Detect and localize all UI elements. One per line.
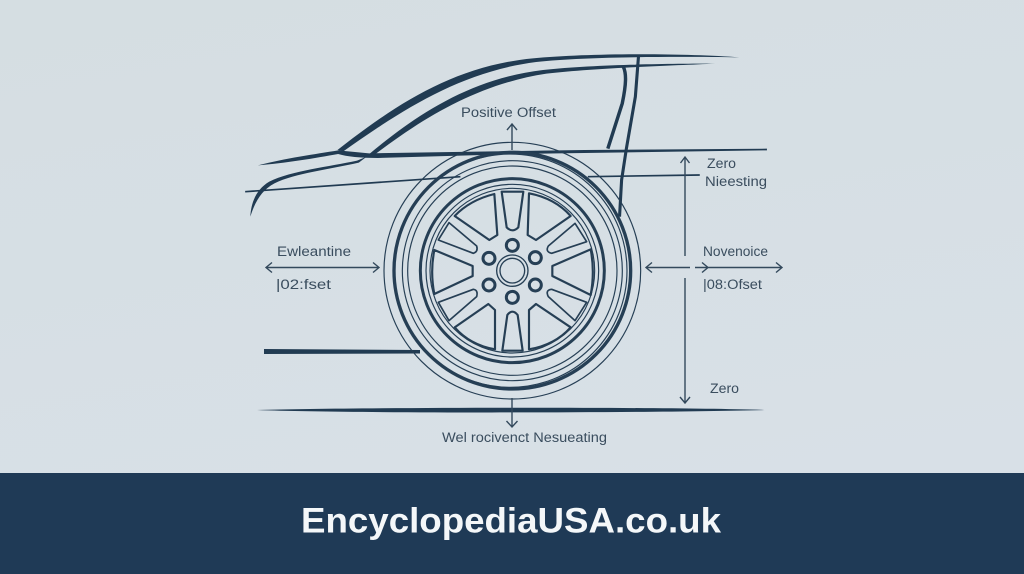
label: right upper: Novenoice xyxy=(703,244,768,259)
label: zero nesting: Zero xyxy=(707,156,736,171)
rim rings xyxy=(420,179,604,363)
footer band xyxy=(0,473,1024,574)
arrow: left double headed xyxy=(266,262,379,272)
label: left lower: |02:fset xyxy=(276,277,331,292)
car body outline xyxy=(245,54,767,217)
arrow: vertical lower xyxy=(680,278,690,403)
label: zero: Zero xyxy=(710,381,739,396)
tyre rings xyxy=(384,142,641,399)
B pillar xyxy=(620,57,638,217)
label: zero nesting xyxy=(705,156,767,189)
ground line xyxy=(257,408,767,412)
lug nuts xyxy=(483,239,541,303)
spoke windows xyxy=(432,192,593,351)
belt line xyxy=(258,149,767,165)
window inner line xyxy=(368,64,715,155)
footer title: EncyclopediaUSA.co.uk xyxy=(301,502,722,540)
label: bottom: Wel rocivenct Nesueating xyxy=(442,430,607,445)
arrow: bottom down xyxy=(506,398,518,427)
sill line xyxy=(245,175,700,192)
arrow: vertical upper xyxy=(680,157,690,256)
lower body line xyxy=(264,349,420,354)
wheel xyxy=(384,142,641,399)
roof outer line xyxy=(337,54,739,151)
arrow: right outward xyxy=(695,262,782,272)
label: positive offset: Positive Offset xyxy=(461,105,556,120)
label: zero nesting: Nieesting xyxy=(705,174,767,189)
window rear pillar xyxy=(608,67,626,149)
label: right lower: |08:Ofset xyxy=(703,277,762,292)
hood line xyxy=(250,157,367,217)
hub xyxy=(497,255,528,286)
label: left upper: Ewleantine xyxy=(277,244,351,259)
arrow: right inward xyxy=(646,262,690,272)
arrow: positive offset up xyxy=(507,124,517,150)
